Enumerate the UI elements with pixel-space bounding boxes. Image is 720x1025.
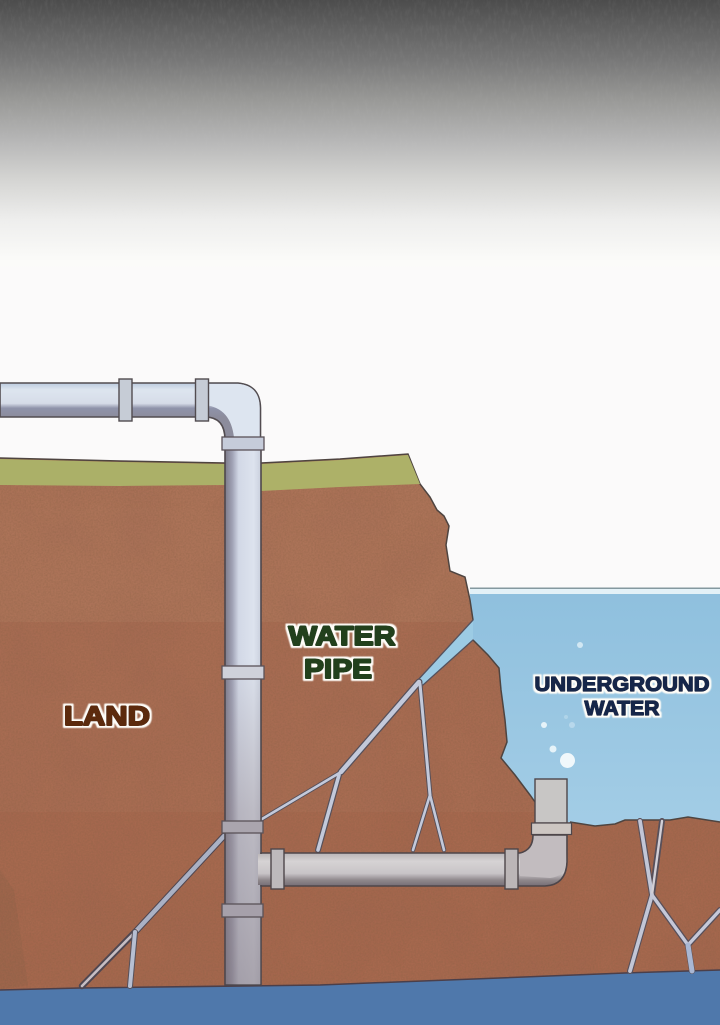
lower horizontal pipe with elbow and intake (258, 779, 572, 889)
lower collar left (271, 849, 284, 889)
label: underground water: UNDERGROUND (534, 673, 710, 696)
label: underground water: WATER (584, 697, 660, 720)
elbow body shade (520, 836, 566, 878)
pipe collar 2 (196, 379, 208, 421)
crack: central network light core (262, 682, 444, 850)
bottom deep water (0, 970, 720, 1025)
intake collar (532, 823, 572, 834)
underground water body (470, 588, 720, 834)
intake box (535, 779, 567, 823)
label: water pipe: PIPE (304, 654, 372, 684)
crack: central network dark casing (262, 682, 444, 850)
grass strip (0, 455, 420, 491)
air bubbles (541, 642, 583, 768)
elbow highlight (205, 384, 260, 438)
label: water pipe: WATER (288, 621, 396, 651)
label: underground water (534, 673, 710, 720)
lower collar right (505, 849, 518, 889)
vertical pipe collars (222, 437, 264, 917)
vertical water pipe (222, 437, 264, 985)
upper water pipe with elbow (0, 379, 260, 440)
land mass (0, 450, 720, 995)
label: land: LAND (64, 701, 150, 731)
crack: left network (82, 836, 224, 986)
crack: large wedge from sea (417, 620, 473, 685)
crack: right network (630, 821, 720, 971)
label: water pipe (288, 621, 396, 684)
pipe collar 1 (119, 379, 132, 421)
bottom water outline (0, 970, 720, 990)
dark sky gradient at top (0, 0, 720, 236)
water-filled cracks (82, 620, 720, 986)
